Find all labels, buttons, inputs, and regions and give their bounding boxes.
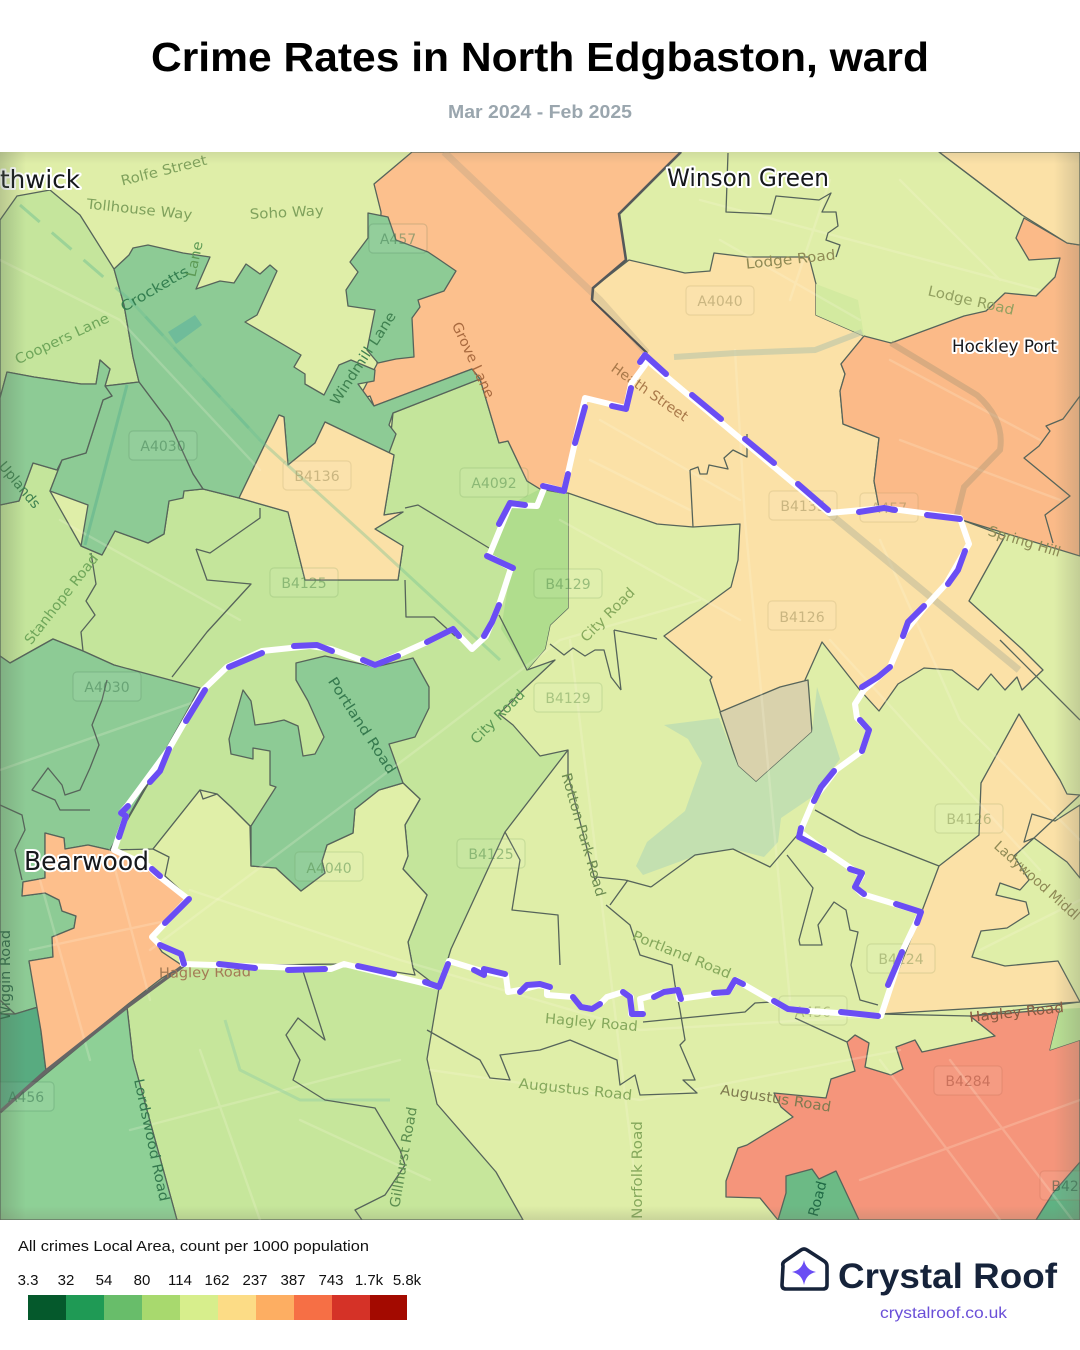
street network <box>0 180 1080 1230</box>
road number badges: B4126 <box>779 610 825 626</box>
road number badges: B4284 <box>945 1074 991 1090</box>
road name labels <box>0 153 1080 1219</box>
road number badges <box>0 224 1080 1200</box>
road number badges: B4129 <box>545 577 591 593</box>
road name labels: Lodge Road <box>926 283 1016 319</box>
place labels: Winson Green <box>667 164 829 192</box>
road name labels: Lordswood Road <box>130 1077 172 1203</box>
road number badges: B4129 <box>545 691 591 707</box>
road number badges: B4136 <box>294 469 340 485</box>
road number badges: B4135 <box>780 499 826 515</box>
brand name: Crystal Roof <box>838 1257 1057 1296</box>
road name labels: Crocketts <box>118 264 192 315</box>
legend scale values: 32 <box>58 1272 74 1289</box>
road number badges: B4125 <box>468 847 514 863</box>
road name labels: Rotton Park Road <box>558 771 608 899</box>
road name labels: Portland Road <box>324 674 399 777</box>
road number badges: A4040 <box>306 861 352 877</box>
road name labels: Norfolk Road <box>630 1121 646 1219</box>
legend scale values: 387 <box>280 1272 306 1289</box>
road name labels: Road <box>806 1180 831 1218</box>
road name labels: Augustus Road <box>719 1082 832 1116</box>
brand url: crystalroof.co.uk <box>880 1305 1008 1322</box>
legend scale values: 237 <box>242 1272 268 1289</box>
road name labels: Hagley Road <box>969 1000 1065 1026</box>
internal boundary lines <box>0 152 1080 1220</box>
legend scale values: 54 <box>96 1272 112 1289</box>
icon: Crystal Roof house logo <box>782 1249 827 1289</box>
place labels: Bearwood <box>24 847 149 877</box>
road number badges: B4125 <box>281 576 327 592</box>
legend scale values <box>18 1272 422 1289</box>
road name labels: Heath Street <box>608 360 691 425</box>
road name labels: City Road <box>468 687 529 748</box>
road name labels: Hagley Road <box>159 964 251 982</box>
road name labels: Portland Road <box>630 928 733 982</box>
ward boundary: white casing <box>114 355 969 1016</box>
title: Crime Rates in North Edgbaston, ward <box>151 34 929 80</box>
road name labels: Tollhouse Way <box>85 196 193 224</box>
legend scale values: 743 <box>318 1272 344 1289</box>
road number badges: A4030 <box>140 439 186 455</box>
map regions <box>0 152 1080 1220</box>
road name labels: Stanhope Road <box>22 551 102 648</box>
legend colour bar <box>28 1295 407 1320</box>
road name labels: Grove Lane <box>448 320 497 401</box>
road name labels: Augustus Road <box>518 1076 633 1104</box>
railway and canal bands <box>0 152 1019 1112</box>
road number badges: B4124 <box>878 952 924 968</box>
place labels <box>0 164 1057 877</box>
legend scale values: 162 <box>204 1272 230 1289</box>
road number badges: A457 <box>871 501 907 517</box>
road number badges: A4092 <box>471 476 517 492</box>
road number badges: A456 <box>8 1090 44 1106</box>
road number badges: B4126 <box>946 812 992 828</box>
place labels: Hockley Port <box>952 337 1057 357</box>
road name labels: Spring Hill <box>986 524 1062 561</box>
map edge vignette <box>0 152 1080 1220</box>
choropleth map panel <box>0 152 1080 1230</box>
legend scale values: 1.7k <box>355 1272 384 1289</box>
road name labels: Coopers Lane <box>13 311 112 368</box>
road name labels: Hagley Road <box>544 1011 638 1035</box>
road name labels: Lane <box>184 240 207 278</box>
legend scale values: 114 <box>168 1272 192 1289</box>
subtitle: date range: Mar 2024 - Feb 2025 <box>448 101 632 122</box>
road name labels: Gillhurst Road <box>387 1106 421 1209</box>
legend title: All crimes Local Area, count per 1000 population <box>18 1238 369 1255</box>
place labels: thwick <box>0 165 81 194</box>
road number badges: A4030 <box>84 680 130 696</box>
Bearwood orange area <box>22 833 188 1071</box>
road number badges: A456 <box>795 1005 831 1021</box>
legend scale values: 5.8k <box>393 1272 422 1289</box>
road name labels: City Road <box>578 585 639 646</box>
road number badges: A457 <box>380 232 416 248</box>
road number badges: A4040 <box>697 294 743 310</box>
road name labels: Windmill Lane <box>328 309 400 408</box>
road name labels: Soho Way <box>249 203 324 223</box>
road name labels: Lodge Road <box>745 247 836 273</box>
legend scale values: 3.3 <box>18 1272 38 1289</box>
road name labels: Rolfe Street <box>119 153 209 190</box>
legend scale values: 80 <box>134 1272 150 1289</box>
ward boundary: purple dashes <box>119 355 965 1016</box>
